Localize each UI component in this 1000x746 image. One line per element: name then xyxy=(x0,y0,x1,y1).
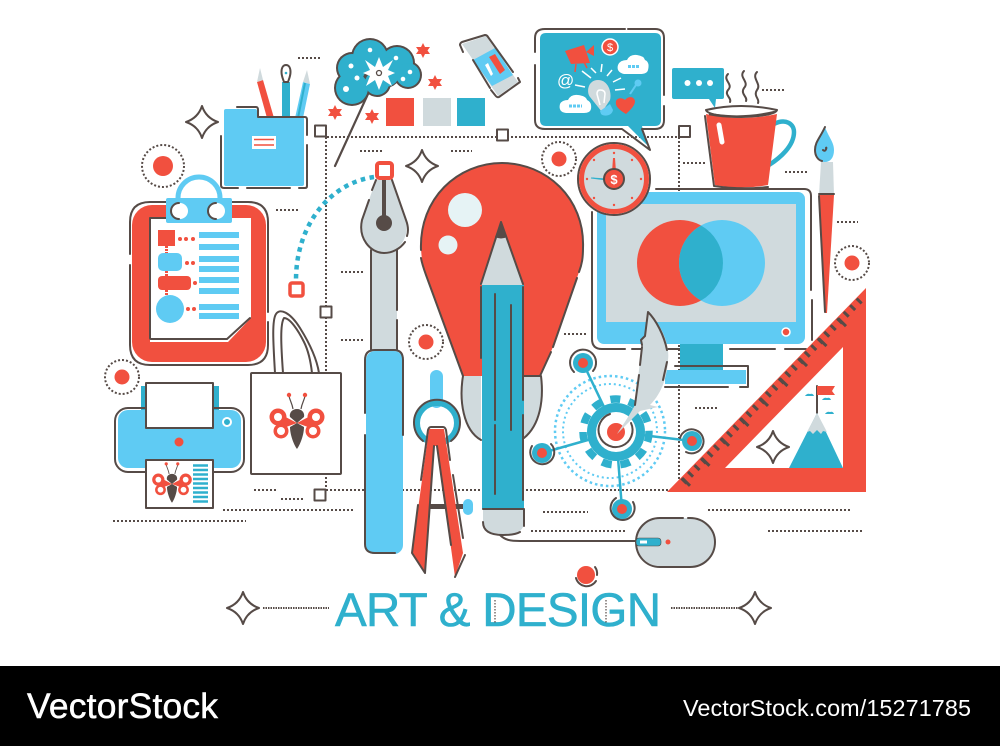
icon: speech bubble with ideas xyxy=(535,29,664,150)
icon: coffee mug xyxy=(705,71,794,188)
icon: set square with mountain xyxy=(667,288,866,492)
icon: clock xyxy=(578,143,650,215)
icon: cloud bottom xyxy=(560,95,591,113)
dotted guide frame xyxy=(314,126,690,500)
icon: printer xyxy=(115,383,244,508)
icon: mouse xyxy=(500,518,715,567)
icon: idea bulb xyxy=(588,80,613,116)
red dot above title xyxy=(576,566,597,586)
node right xyxy=(680,429,704,453)
icon: small chat bubble xyxy=(672,68,724,108)
icon: dollar coin: $ xyxy=(607,42,613,54)
icon: pens in folder xyxy=(257,65,310,118)
node top left xyxy=(570,350,596,373)
short dotted accent lines xyxy=(113,58,863,531)
rays xyxy=(575,64,625,90)
icon: light bulb xyxy=(421,163,583,440)
at sign: @ xyxy=(557,71,574,90)
icon: pencil xyxy=(481,222,524,535)
icon: heart xyxy=(616,97,635,114)
icon: cloud top xyxy=(618,55,649,74)
icon: tote bag xyxy=(251,311,341,474)
icon: eraser xyxy=(460,35,520,97)
icon: compass xyxy=(412,370,473,577)
icon: clipboard xyxy=(130,177,268,365)
image id: VectorStock.com/15271785 xyxy=(683,695,971,721)
icon: folder xyxy=(221,107,307,188)
footer band xyxy=(0,666,1000,746)
icon: monitor xyxy=(592,189,812,387)
dashed arc connector xyxy=(290,177,374,296)
venn diagram xyxy=(637,220,765,306)
gear network xyxy=(530,350,704,520)
title: ART & DESIGN xyxy=(335,584,661,637)
colour swatches xyxy=(386,98,485,126)
icon: video camera xyxy=(565,45,594,72)
icon: fountain pen xyxy=(361,163,408,554)
icon: feather xyxy=(617,312,668,434)
node left xyxy=(530,443,554,464)
icon: paint brush xyxy=(815,127,834,313)
red small stars xyxy=(328,43,442,124)
icon: key xyxy=(630,80,642,94)
decorative target dots xyxy=(105,142,869,394)
brand name: VectorStock xyxy=(27,686,218,726)
icon: clock: $ xyxy=(610,172,618,187)
decorative sparkle stars xyxy=(186,106,438,182)
icon: magic wand cloud xyxy=(334,38,422,166)
title side ornaments xyxy=(227,592,771,624)
node bottom xyxy=(611,498,635,520)
